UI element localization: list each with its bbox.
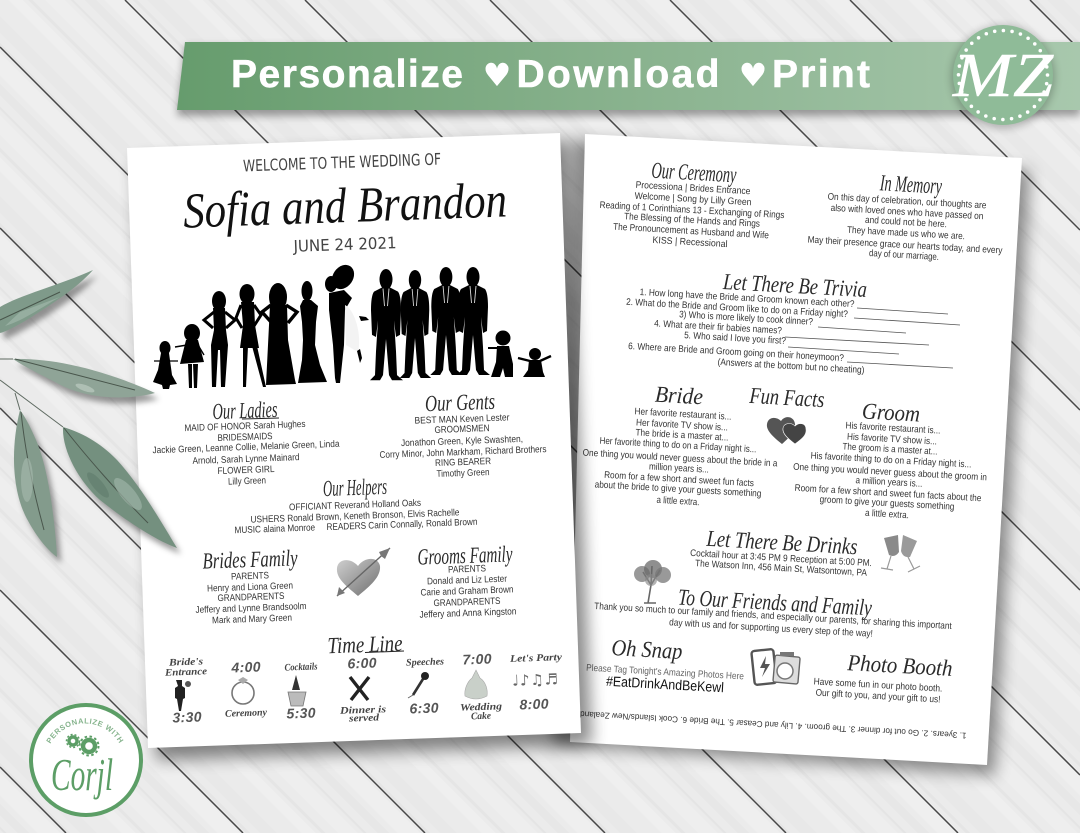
banner text: Print bbox=[772, 53, 870, 96]
text: gents list: Corry Minor, John Markham, Richard Brothers bbox=[379, 444, 547, 461]
text: groom fun facts: One thing you would never guess about the groom in bbox=[793, 462, 987, 483]
timeline item: speeches: 6:30 bbox=[409, 699, 439, 717]
text: gents list: RING BEARER bbox=[435, 456, 491, 469]
timeline item: ceremony bbox=[225, 658, 268, 720]
heading: Bride: Bride bbox=[654, 382, 704, 409]
text: drinks details bbox=[690, 548, 872, 579]
badge logotype: Corjl bbox=[51, 749, 113, 800]
text: grooms family bbox=[419, 563, 517, 621]
text: in memory message: They have made us who we are. bbox=[847, 225, 965, 242]
timeline item: cocktails bbox=[284, 661, 318, 722]
text: groom fun facts: groom to give your guests something bbox=[819, 494, 955, 513]
flower girl bbox=[153, 341, 178, 389]
groomsman three bbox=[430, 267, 463, 375]
text: grooms family: GRANDPARENTS bbox=[433, 596, 501, 609]
heading: Oh Snap: Oh Snap bbox=[611, 635, 683, 664]
text: upside-down trivia answers: 1. 3years. 2. Go out for dinner 3. The groom. 4. Lily and Ceasar 5. The Bride 6. Cook Islands/New Zealand bbox=[580, 709, 967, 741]
timeline item: wedding cake: Wedding bbox=[460, 701, 502, 714]
heading: Let There Be Trivia: Let There Be Trivia bbox=[722, 269, 868, 302]
groomsman four bbox=[457, 267, 490, 375]
ring bearer bbox=[488, 330, 513, 377]
title: welcome: WELCOME TO THE WEDDING OF bbox=[243, 150, 441, 175]
heading: Our Helpers: Our Helpers bbox=[323, 474, 387, 501]
left page shadow bbox=[135, 140, 592, 760]
text: in memory message: day of our marriage. bbox=[869, 248, 939, 263]
text: trivia questions: 6. Where are Bride and Groom going on their honeymoon? bbox=[628, 341, 844, 364]
junior bridesmaid bbox=[175, 324, 204, 388]
text: brides family: Mark and Mary Green bbox=[212, 613, 292, 626]
text: bride fun facts: about the bride to give your guests something bbox=[594, 479, 762, 500]
text: gents list bbox=[379, 412, 547, 480]
text: bride fun facts bbox=[582, 406, 778, 508]
heading: Brides Family: Brides Family bbox=[202, 545, 298, 574]
illustration: wedding party silhouettes bbox=[153, 261, 551, 389]
text: ladies list: BRIDESMAIDS bbox=[217, 431, 273, 444]
timeline item: speeches: Speeches bbox=[406, 656, 444, 669]
leaves branch bbox=[0, 270, 177, 557]
text: groom fun facts: His favorite TV show is... bbox=[847, 431, 937, 448]
text: grooms family: Donald and Liz Lester bbox=[427, 574, 507, 587]
text: groom fun facts bbox=[793, 420, 987, 521]
timeline item: let's party: ♩♪♫♬ bbox=[512, 670, 558, 690]
text: bride fun facts: Her favorite thing to do on a Friday night is... bbox=[599, 436, 757, 455]
icon: two hearts bbox=[767, 417, 806, 444]
heading: Groom: Groom bbox=[861, 398, 921, 427]
banner bbox=[177, 42, 1080, 116]
text: hashtag block: Please Tag Tonight's Amazing Photos Here bbox=[586, 663, 744, 682]
heading: In Memory: In Memory bbox=[879, 170, 943, 199]
heading: Time Line: Time Line bbox=[327, 631, 403, 658]
timeline item: bride's entrance: 3:30 bbox=[172, 708, 202, 726]
text: ceremony order bbox=[599, 180, 785, 250]
text: thank you message: Thank you so much to our family and friends, and especially our parents, for sharing this important bbox=[594, 601, 952, 632]
heading: To Our Friends and Family: To Our Friends and Family bbox=[677, 585, 873, 620]
icon: champagne glasses bbox=[881, 535, 920, 572]
bridesmaid four bbox=[298, 281, 327, 383]
timeline item: wedding cake bbox=[460, 650, 502, 722]
text: gents list: BEST MAN Keven Lester bbox=[414, 412, 510, 427]
text: helpers list: OFFICIANT Reverand Holland Oaks bbox=[289, 498, 421, 513]
MZ logo badge bbox=[951, 25, 1055, 129]
timeline item: ceremony: 4:00 bbox=[230, 658, 261, 676]
bridesmaid two bbox=[236, 284, 266, 387]
leaf one bbox=[0, 270, 93, 333]
Corjl badge bbox=[29, 703, 143, 817]
icon: gears bbox=[66, 734, 98, 756]
icon: tree bbox=[634, 560, 671, 603]
heading: Fun Facts: Fun Facts bbox=[748, 383, 825, 412]
text: ceremony order: Processiona | Brides Entrance bbox=[635, 180, 751, 197]
text: ladies list: FLOWER GIRL bbox=[217, 464, 275, 477]
panel: program front page bbox=[127, 133, 581, 748]
right page shadow bbox=[552, 140, 1030, 775]
text: photo booth message: Have some fun in our photo booth. bbox=[813, 676, 943, 695]
text: bride fun facts: million years is... bbox=[649, 461, 709, 476]
text: gents list: Jonathon Green, Kyle Swashten, bbox=[401, 434, 523, 449]
text: in memory message: On this day of celebration, our thoughts are bbox=[827, 192, 987, 211]
heading: Our Ladies bbox=[212, 397, 279, 424]
baby bbox=[518, 348, 551, 377]
text: photo booth message: Our gift to you, and your gift to us! bbox=[815, 688, 941, 705]
text: ceremony order: Welcome | Song by Lilly Green bbox=[634, 191, 752, 208]
text: ladies list: MAID OF HONOR Sarah Hughes bbox=[184, 419, 306, 434]
heading: Grooms Family: Grooms Family bbox=[417, 541, 513, 570]
text: groom fun facts: a little extra. bbox=[865, 508, 909, 521]
timeline item: dinner is served bbox=[339, 654, 386, 725]
timeline item: bride's entrance bbox=[164, 656, 208, 726]
date: JUNE 24 2021 bbox=[292, 233, 397, 256]
timeline item: let's party bbox=[509, 652, 563, 713]
heading: Our Ladies: Our Ladies bbox=[212, 397, 278, 424]
text: brides family bbox=[195, 570, 307, 626]
text: ceremony order: KISS | Recessional bbox=[652, 235, 728, 250]
timeline item: bride's entrance: Entrance bbox=[164, 666, 208, 679]
timeline item: dinner is served: 6:00 bbox=[347, 654, 377, 672]
bridesmaid one bbox=[204, 291, 235, 387]
text: gents list: Timothy Green bbox=[436, 467, 490, 480]
timeline item: cocktails: 5:30 bbox=[286, 704, 316, 722]
icon: phone and camera bbox=[751, 649, 800, 685]
text: in memory message: May their presence grace our hearts today, and every bbox=[807, 235, 1003, 256]
bridesmaid three bbox=[262, 283, 297, 385]
groomsman two bbox=[400, 270, 431, 378]
panel: program back page bbox=[570, 134, 1022, 765]
text: groom fun facts: a million years is... bbox=[855, 475, 923, 490]
banner text bbox=[231, 53, 870, 96]
text: bride fun facts: The bride is a master at... bbox=[635, 427, 729, 444]
text: grooms family: Jeffery and Anna Kingston bbox=[419, 606, 517, 621]
text: grooms family: Carie and Graham Brown bbox=[420, 584, 514, 599]
text: ceremony order: The Pronouncement as Husband and Wife bbox=[613, 222, 769, 241]
text: bride fun facts: Her favorite TV show is... bbox=[636, 417, 728, 434]
text: trivia questions bbox=[626, 287, 960, 376]
timeline item: let's party: 8:00 bbox=[519, 695, 549, 713]
text: groom fun facts: His favorite thing to do on a Friday night is... bbox=[810, 451, 972, 470]
text: in memory message: also with loved ones who have passed on bbox=[830, 203, 984, 222]
groomsman one bbox=[370, 269, 403, 380]
text: groom fun facts: Room for a few short and sweet fun facts about the bbox=[794, 483, 982, 504]
timeline item: let's party: Let's Party bbox=[509, 652, 563, 665]
text: groom fun facts: The groom is a master at... bbox=[842, 441, 938, 458]
MZ logo badge: MZ bbox=[952, 42, 1054, 110]
timeline item: cocktails: Cocktails bbox=[284, 661, 318, 674]
timeline item: dinner is served: Dinner is bbox=[339, 704, 386, 717]
leaf three bbox=[14, 410, 57, 557]
text: ladies list: Jackie Green, Leanne Collie, Melanie Green, Linda bbox=[152, 439, 340, 456]
text: in memory message bbox=[807, 192, 1003, 263]
text: ceremony order: The Blessing of the Hands and Rings bbox=[624, 211, 760, 230]
text: bride fun facts: One thing you would never guess about the bride in a bbox=[582, 448, 778, 469]
text: trivia questions: 3) Who is more likely to cook dinner? bbox=[679, 309, 813, 328]
text: brides family: Jeffery and Lynne Brandsoolm bbox=[195, 601, 307, 616]
text: trivia questions: 5. Who said I love you first? bbox=[684, 330, 786, 347]
banner text: ♥ bbox=[483, 56, 511, 94]
text: gents list: GROOMSMEN bbox=[434, 423, 490, 436]
text: grooms family: PARENTS bbox=[448, 563, 486, 576]
text: hashtag block bbox=[586, 663, 744, 695]
text: brides family: GRANDPARENTS bbox=[217, 591, 285, 604]
timeline item: dinner is served: served bbox=[348, 712, 380, 725]
text: helpers list: MUSIC alaina Monroe READERS Carin Connally, Ronald Brown bbox=[234, 517, 478, 536]
text: groom fun facts: His favorite restaurant is... bbox=[845, 420, 941, 437]
timeline item: bride's entrance: Bride's bbox=[168, 656, 203, 669]
timeline item: wedding cake: Cake bbox=[471, 711, 492, 722]
text: ladies list bbox=[152, 419, 340, 488]
leaf four bbox=[63, 427, 177, 548]
text: trivia questions: 4. What are their fir babies names? bbox=[654, 318, 782, 337]
text: bride fun facts: Her favorite restaurant is... bbox=[634, 406, 732, 423]
banner text: ♥ bbox=[739, 56, 767, 94]
text: drinks details: Cocktail hour at 3:45 PM 9 Reception at 5:00 PM. bbox=[690, 548, 872, 569]
text: brides family: PARENTS bbox=[231, 570, 269, 583]
leaf two bbox=[13, 359, 155, 397]
text: ladies list: Lilly Green bbox=[228, 475, 266, 488]
title: couple names: Sofia and Brandon bbox=[182, 171, 508, 239]
timeline item: speeches bbox=[406, 656, 444, 717]
heading: Our Gents: Our Gents bbox=[425, 389, 495, 416]
text: bride fun facts: Room for a few short and sweet fun facts bbox=[604, 470, 754, 489]
timeline item: ceremony: Ceremony bbox=[225, 707, 268, 720]
icon: heart with arrow bbox=[337, 548, 390, 596]
heading: Photo Booth: Photo Booth bbox=[846, 650, 953, 681]
text: thank you message: day with us and for supporting us every step of the way! bbox=[669, 617, 873, 640]
timeline item: wedding cake: 7:00 bbox=[462, 650, 492, 668]
text: brides family: Henry and Liona Green bbox=[207, 581, 293, 594]
heading: Our Ceremony: Our Ceremony bbox=[651, 158, 738, 187]
text: drinks details: The Watson Inn, 456 Main St, Watsontown, PA bbox=[695, 558, 868, 579]
text: photo booth message bbox=[813, 676, 943, 705]
banner text: Download bbox=[516, 53, 720, 96]
text: ceremony order: Reading of 1 Corinthians 13 - Exchanging of Rings bbox=[599, 200, 785, 221]
heading: Let There Be Drinks: Let There Be Drinks bbox=[705, 526, 858, 559]
text: helpers list bbox=[234, 498, 478, 536]
text: helpers list: USHERS Ronald Brown, Keneth Bronson, Elvis Rachelle bbox=[250, 507, 460, 526]
badge arc text: PERSONALIZE WITH bbox=[46, 718, 124, 744]
text: in memory message: and could not be here. bbox=[865, 215, 947, 230]
banner text: Personalize bbox=[231, 53, 463, 96]
text: trivia questions: (Answers at the bottom but no cheating) bbox=[717, 357, 865, 376]
bride and groom bbox=[325, 261, 369, 383]
text: ladies list: Arnold, Sarah Lynne Mainard bbox=[192, 452, 300, 467]
text: trivia questions: 1. How long have the Bride and Groom known each other? bbox=[639, 287, 855, 310]
text: bride fun facts: a little extra. bbox=[656, 495, 700, 508]
text: hashtag block: #EatDrinkAndBeKewl bbox=[606, 673, 724, 695]
text: trivia questions: 2. What do the Bride and Groom like to do on a Friday night? bbox=[626, 297, 848, 320]
